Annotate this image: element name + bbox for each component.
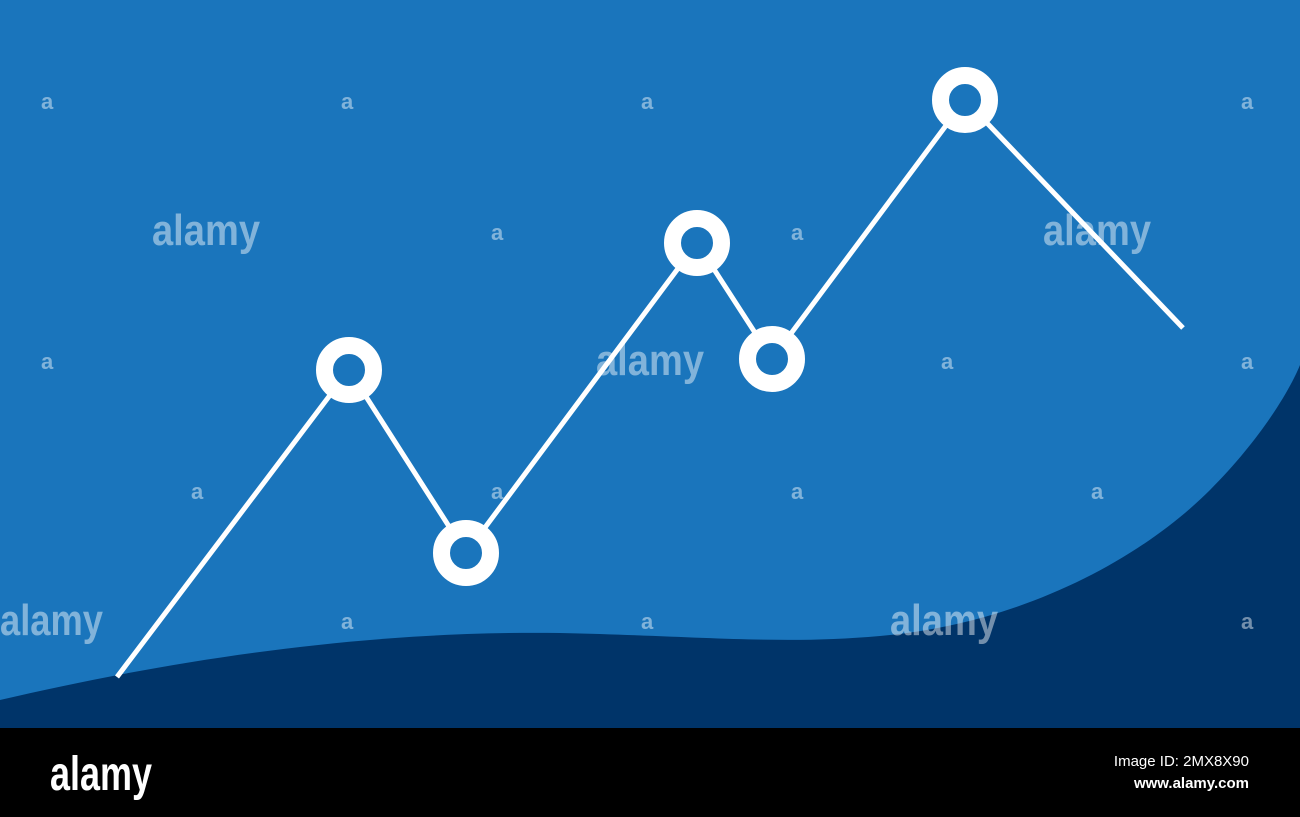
watermarks: alamy: [1043, 206, 1151, 255]
watermarks: alamy: [0, 596, 103, 645]
watermarks: a: [341, 609, 354, 634]
watermarks: a: [791, 220, 804, 245]
watermarks: a: [341, 89, 354, 114]
line chart: [117, 76, 1183, 677]
watermarks: alamy: [890, 596, 998, 645]
footer bar: www.alamy.com: [1133, 775, 1249, 792]
watermarks: alamy: [152, 206, 260, 255]
watermarks: a: [1241, 609, 1254, 634]
watermarks: a: [41, 349, 54, 374]
footer bar: Image ID: 2MX8X90: [1114, 753, 1249, 770]
watermarks: a: [491, 479, 504, 504]
footer bar: [0, 728, 1300, 817]
footer bar: alamy: [50, 748, 152, 801]
watermarks: a: [1091, 479, 1104, 504]
watermarks: a: [941, 349, 954, 374]
watermarks: a: [1241, 349, 1254, 374]
watermarks: a: [491, 220, 504, 245]
watermarks: [0, 89, 1254, 645]
watermarks: a: [791, 479, 804, 504]
watermarks: a: [1241, 89, 1254, 114]
dark wave: [0, 365, 1300, 728]
watermarks: a: [641, 609, 654, 634]
watermarks: a: [191, 479, 204, 504]
watermarks: a: [641, 89, 654, 114]
watermarks: a: [41, 89, 54, 114]
watermarks: alamy: [596, 336, 704, 385]
